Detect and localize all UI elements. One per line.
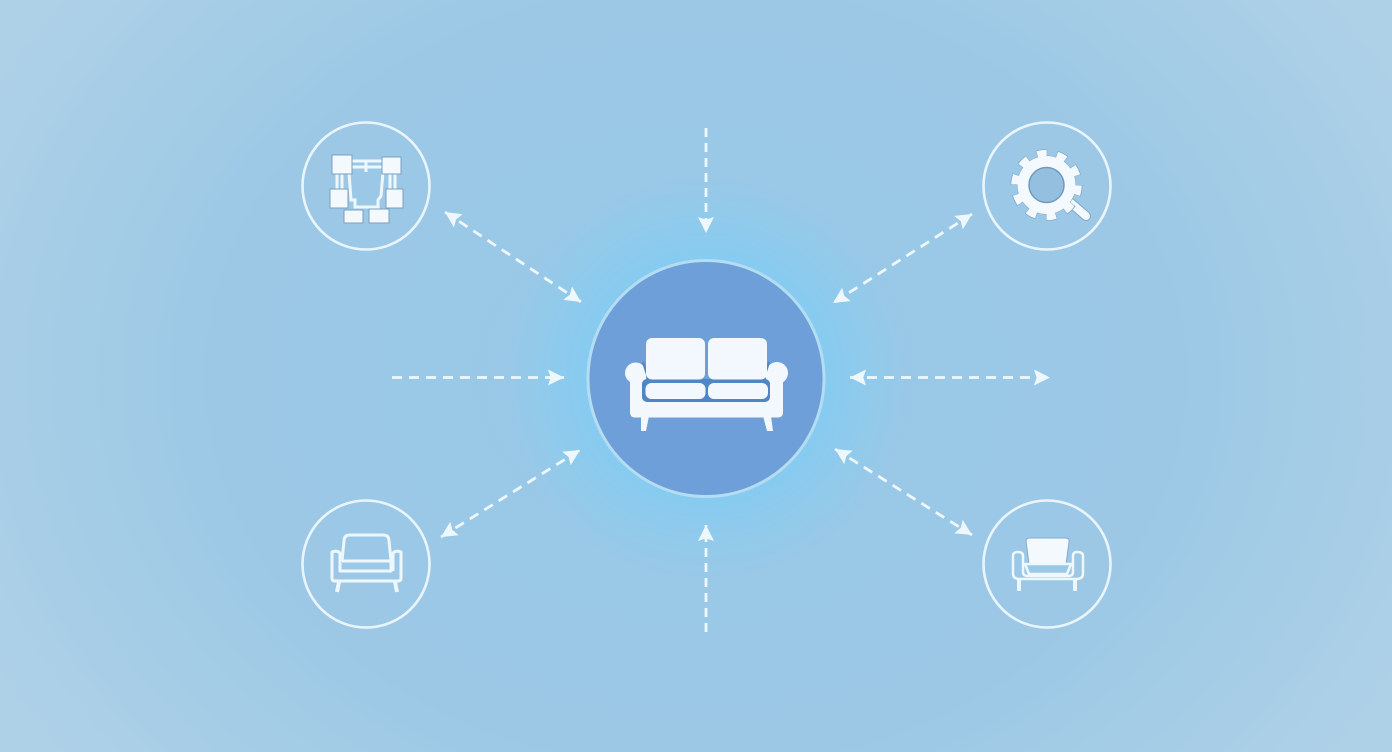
node: network <box>302 122 430 250</box>
arrow: bottom right <box>835 449 972 535</box>
node: gear search <box>984 122 1110 250</box>
icon: sofa <box>625 338 788 431</box>
arrow: top left <box>445 212 581 302</box>
arrow: left <box>392 376 564 379</box>
arrow: top <box>705 128 707 233</box>
icon: filled armchair <box>1013 538 1083 591</box>
node: filled armchair <box>984 500 1110 628</box>
arrow: bottom <box>705 525 707 632</box>
icon: outline armchair <box>332 535 401 592</box>
central hub with sofa <box>588 260 824 496</box>
node: outline armchair <box>302 500 430 628</box>
icon: gear with magnifier <box>1014 153 1086 217</box>
icon: connected squares <box>330 155 403 223</box>
arrow: top right <box>833 214 972 303</box>
arrow: bottom left <box>441 450 580 537</box>
arrow: right <box>850 376 1050 379</box>
